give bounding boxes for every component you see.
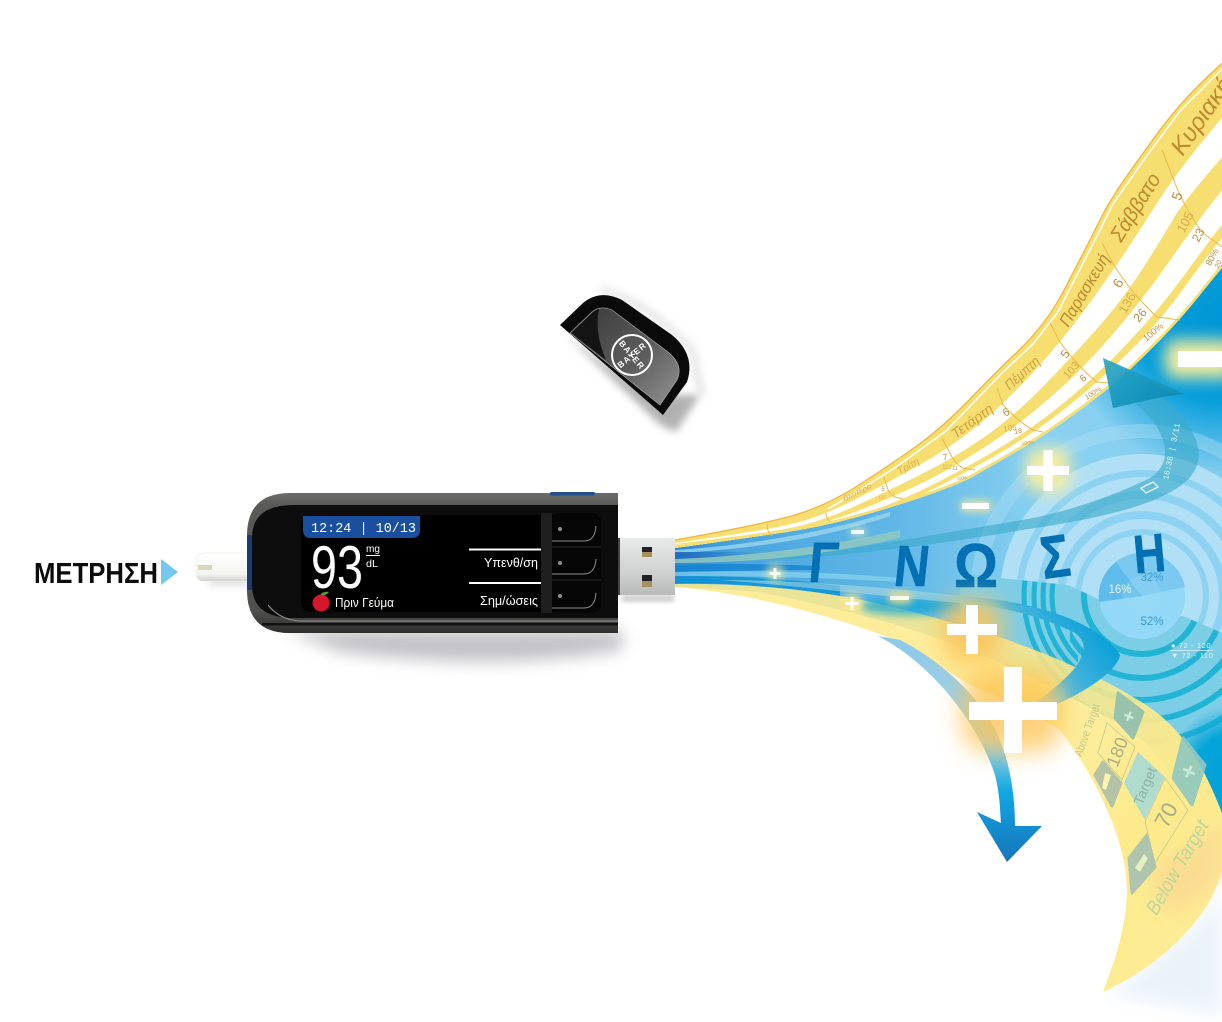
icon: light blue arrow (161, 559, 178, 585)
plus sign tiny (770, 568, 780, 579)
units: mg (366, 543, 380, 555)
above target label: Above Target (1073, 702, 1103, 758)
cap shell (560, 295, 689, 415)
above target plus key (1115, 693, 1143, 738)
day names: Δευτέρα (840, 481, 873, 503)
blue downward arrow (878, 636, 1042, 862)
day names (840, 73, 1222, 503)
reminder menu item: Υπενθ/ση (484, 556, 538, 570)
arrow text: 16:38 | 3/11 (1162, 422, 1183, 481)
minus sign lower (890, 596, 909, 600)
title word ΓΝΩΣΗ (806, 521, 1168, 601)
highlight line (828, 44, 1222, 509)
soft keys (541, 513, 601, 613)
180 limit cell (1098, 723, 1135, 780)
time and date header: 12:24 | 10/13 (311, 521, 416, 537)
title word ΓΝΩΣΗ: Ω (954, 532, 998, 601)
meal tag: Πριν Γεύμα (335, 596, 394, 610)
target plus key: + (1176, 756, 1201, 787)
side button (247, 535, 252, 590)
ribbon top edge (675, 40, 1222, 540)
label: measurement: ΜΕΤΡΗΣΗ (34, 558, 158, 590)
USB connector (618, 538, 675, 595)
daily values: 5 (1168, 189, 1186, 202)
test strip (196, 553, 250, 586)
target range ribbon (675, 584, 1222, 992)
day names: Σάββατο (1105, 169, 1166, 247)
title word ΓΝΩΣΗ: Σ (1036, 521, 1074, 592)
daily values: 6 (1078, 372, 1090, 385)
pie chart: 52% (1140, 616, 1164, 628)
time and date header (303, 516, 420, 538)
daily values: 6 (1001, 406, 1012, 419)
target cell (1124, 752, 1165, 820)
title word ΓΝΩΣΗ: Γ (806, 531, 841, 595)
target range values (1170, 641, 1213, 660)
USB shadow (622, 595, 674, 602)
daily values: 100% (1084, 386, 1103, 402)
minus sign small (851, 530, 864, 534)
reminder menu item (469, 548, 541, 570)
below target label: Below Target (1142, 815, 1214, 918)
180 limit cell: 180 (1102, 734, 1132, 770)
plus sign upper (1027, 450, 1069, 491)
icon: apple (312, 592, 330, 612)
daily values: 26 (1130, 305, 1150, 325)
daily values: 105 (1173, 209, 1197, 235)
Bayer logo: BAYER (615, 340, 649, 370)
units (366, 543, 380, 570)
title word ΓΝΩΣΗ: Η (1131, 523, 1168, 585)
daily values: 103 (1061, 360, 1082, 381)
glows behind plus and minus signs (767, 340, 1222, 752)
cap top surface (570, 308, 679, 405)
device shadow (285, 630, 622, 662)
day names: Τρίτη (895, 455, 922, 478)
daily values: 100% (957, 475, 968, 481)
daily values: 23 (1189, 226, 1208, 244)
plus sign large (969, 667, 1057, 753)
teal glow under swoosh (860, 597, 960, 615)
pale shadow bottom right (1110, 895, 1222, 1015)
minus sign upper (962, 503, 989, 509)
screen (301, 515, 601, 612)
plus sign medium (947, 605, 997, 654)
daily values: 120 (878, 495, 886, 500)
daily values: 11 (952, 466, 958, 472)
target range values: ● 72 - 120 (1171, 641, 1211, 650)
minus sign right (1178, 351, 1222, 367)
above target plus key: + (1119, 705, 1138, 729)
meter face (252, 505, 618, 618)
Bayer logo (612, 335, 652, 375)
day dividers (767, 150, 1222, 536)
pie chart (1099, 553, 1185, 639)
meter cap with Bayer logo (560, 290, 702, 432)
day names: Παρασκευή (1055, 251, 1113, 330)
daily values: 100% (1141, 321, 1165, 343)
orange edge tint (1150, 820, 1222, 915)
blue data stream fan (675, 268, 1222, 642)
target range values: ▼ 72 - 110 (1171, 651, 1213, 660)
70 limit cell (1145, 778, 1188, 863)
cap shadow (566, 335, 700, 432)
target cell: Target (1130, 765, 1160, 807)
ribbon stripes (675, 64, 1222, 548)
pie chart: 16% (1108, 584, 1132, 596)
weekly log ribbon (674, 62, 1222, 548)
daily values: 105 (1003, 423, 1018, 434)
daily values: 112 (942, 465, 952, 471)
daily values: 100% (1021, 440, 1035, 447)
lower blue swoosh (720, 580, 1120, 716)
daily values: 6 (1109, 275, 1127, 290)
icon: small battery tag (1141, 482, 1158, 493)
top button (550, 492, 595, 496)
Bayer logo: BAYER (617, 338, 647, 372)
daily values: 5 (881, 487, 885, 493)
units: dL (366, 558, 378, 570)
cap dark left part (571, 309, 606, 360)
target plus key (1173, 738, 1205, 805)
pie chart: 32% (1140, 572, 1164, 584)
glucose reading: 93 (311, 534, 363, 601)
concentric target rings (960, 424, 1222, 813)
daily values: 136 (1115, 290, 1139, 316)
arrow head (1103, 358, 1185, 408)
daily values (878, 189, 1222, 500)
day names: Πέμπτη (1001, 353, 1043, 393)
70 limit cell: 70 (1149, 798, 1183, 832)
daily values: 5 (1058, 347, 1073, 361)
left streaks (675, 512, 900, 596)
above target minus key (1095, 762, 1121, 806)
daily values: 18 (1014, 428, 1023, 436)
title word ΓΝΩΣΗ: Ν (891, 535, 933, 599)
meter body (247, 493, 618, 633)
below target minus key (1129, 835, 1155, 893)
day names: Τετάρτη (948, 400, 996, 441)
plus sign small (846, 597, 858, 610)
blue curved arrow returning upward (760, 358, 1199, 561)
notes menu item: Σημ/ώσεις (480, 594, 538, 608)
daily values: 80% (1203, 247, 1221, 267)
glucose meter device (247, 492, 618, 633)
daily values: 7 (942, 452, 948, 463)
notes menu item (469, 582, 541, 608)
